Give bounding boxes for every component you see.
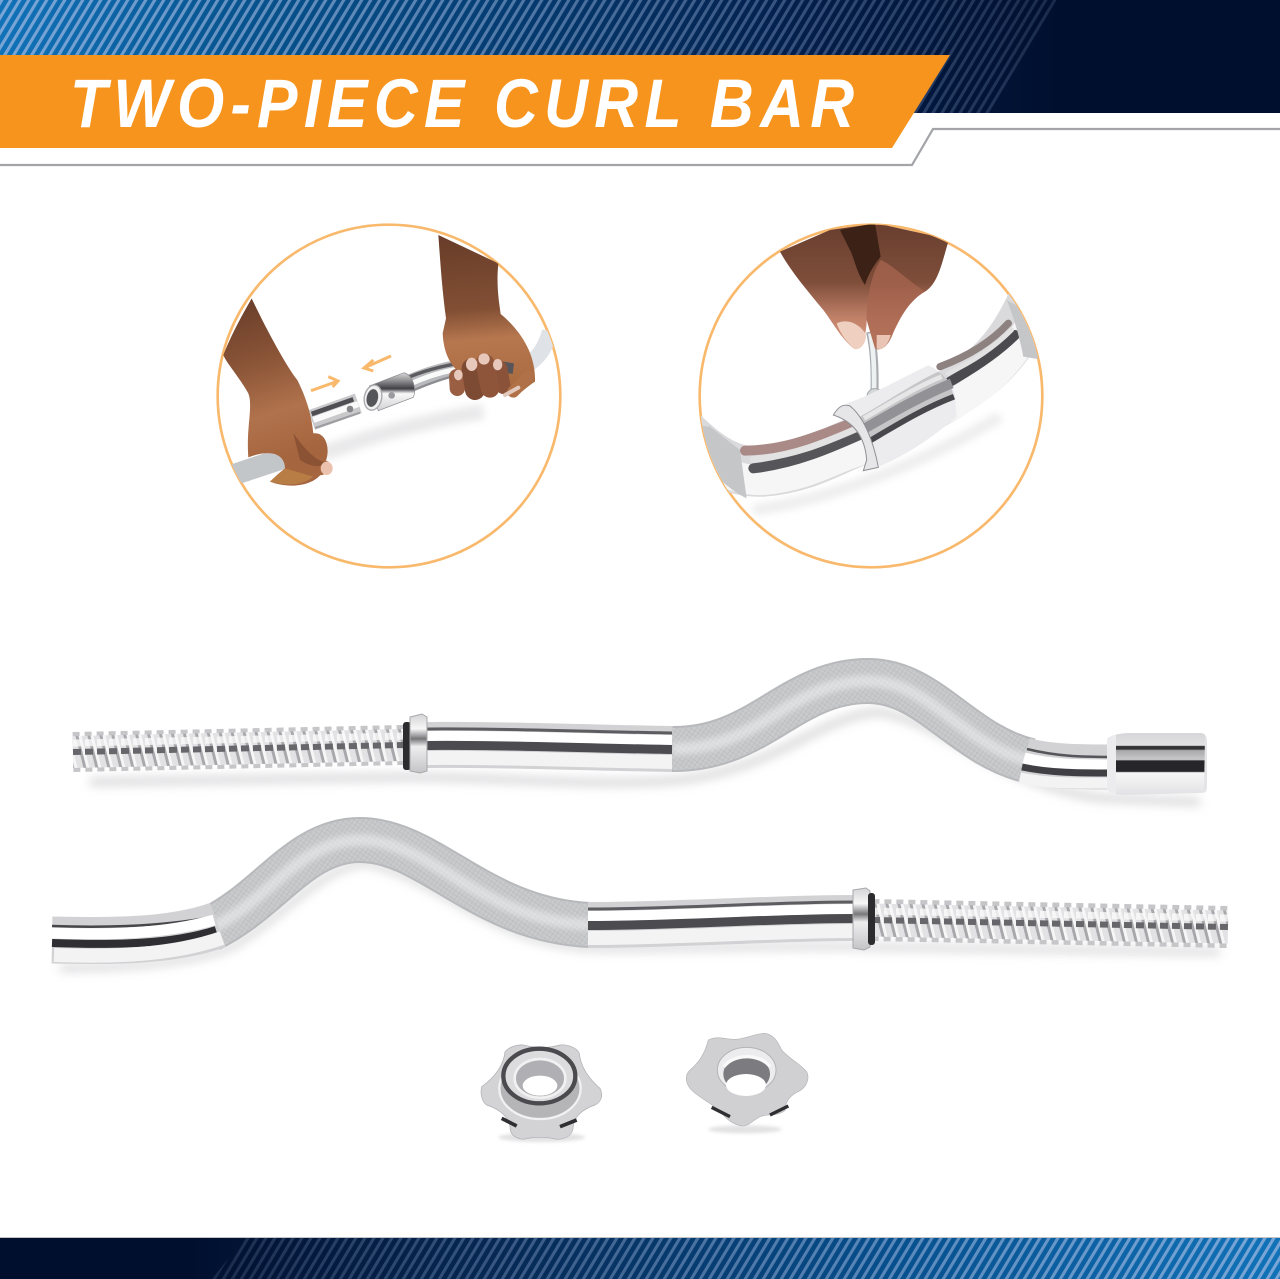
threaded end — [872, 911, 1228, 927]
threaded end — [73, 736, 405, 752]
socket sleeve — [362, 373, 415, 412]
product: bottom curl bar section — [52, 840, 1228, 968]
product: top curl bar section — [73, 681, 1207, 802]
smooth section — [588, 902, 855, 938]
pin — [866, 332, 880, 396]
product: spin-lock collar, ring side up — [481, 1045, 602, 1142]
arrow: pointing left — [364, 356, 391, 371]
sleeve flange — [833, 405, 878, 471]
collar body — [481, 1045, 602, 1139]
header underline stroke — [0, 129, 1280, 165]
sleeve — [847, 365, 957, 468]
shadow — [60, 863, 1220, 968]
title: TWO-PIECE CURL BAR — [70, 64, 854, 142]
knurled grip — [672, 681, 1030, 761]
collar and ring — [853, 888, 875, 950]
silver bar behind right hand — [527, 332, 550, 365]
smooth section — [425, 729, 672, 762]
fingers — [457, 363, 528, 392]
bar shadow — [753, 417, 1000, 510]
panel: circle photo, locking pin — [670, 223, 1048, 567]
collar and ring — [403, 714, 427, 773]
arrow: pointing right — [311, 377, 338, 391]
shadow under bar — [323, 412, 483, 453]
collar body — [686, 1033, 808, 1126]
left hand — [223, 298, 333, 486]
smooth right section — [1020, 749, 1112, 783]
footer band — [0, 1237, 1280, 1279]
right tube — [408, 361, 454, 391]
right hand — [438, 235, 535, 397]
shadow — [90, 712, 1200, 802]
product: spin-lock collar, flat side up — [686, 1033, 808, 1133]
panel: circle photo, joining the two bar pieces — [218, 225, 560, 567]
knurled bar in left hand — [230, 456, 290, 476]
fingers — [780, 223, 948, 349]
header band — [0, 0, 1280, 113]
title banner — [0, 55, 950, 148]
fingernails — [454, 353, 502, 380]
curved bar — [700, 294, 1038, 498]
end socket — [1107, 733, 1207, 795]
smooth left end — [52, 917, 222, 956]
knurled grip — [210, 840, 590, 929]
insert end — [312, 399, 360, 428]
